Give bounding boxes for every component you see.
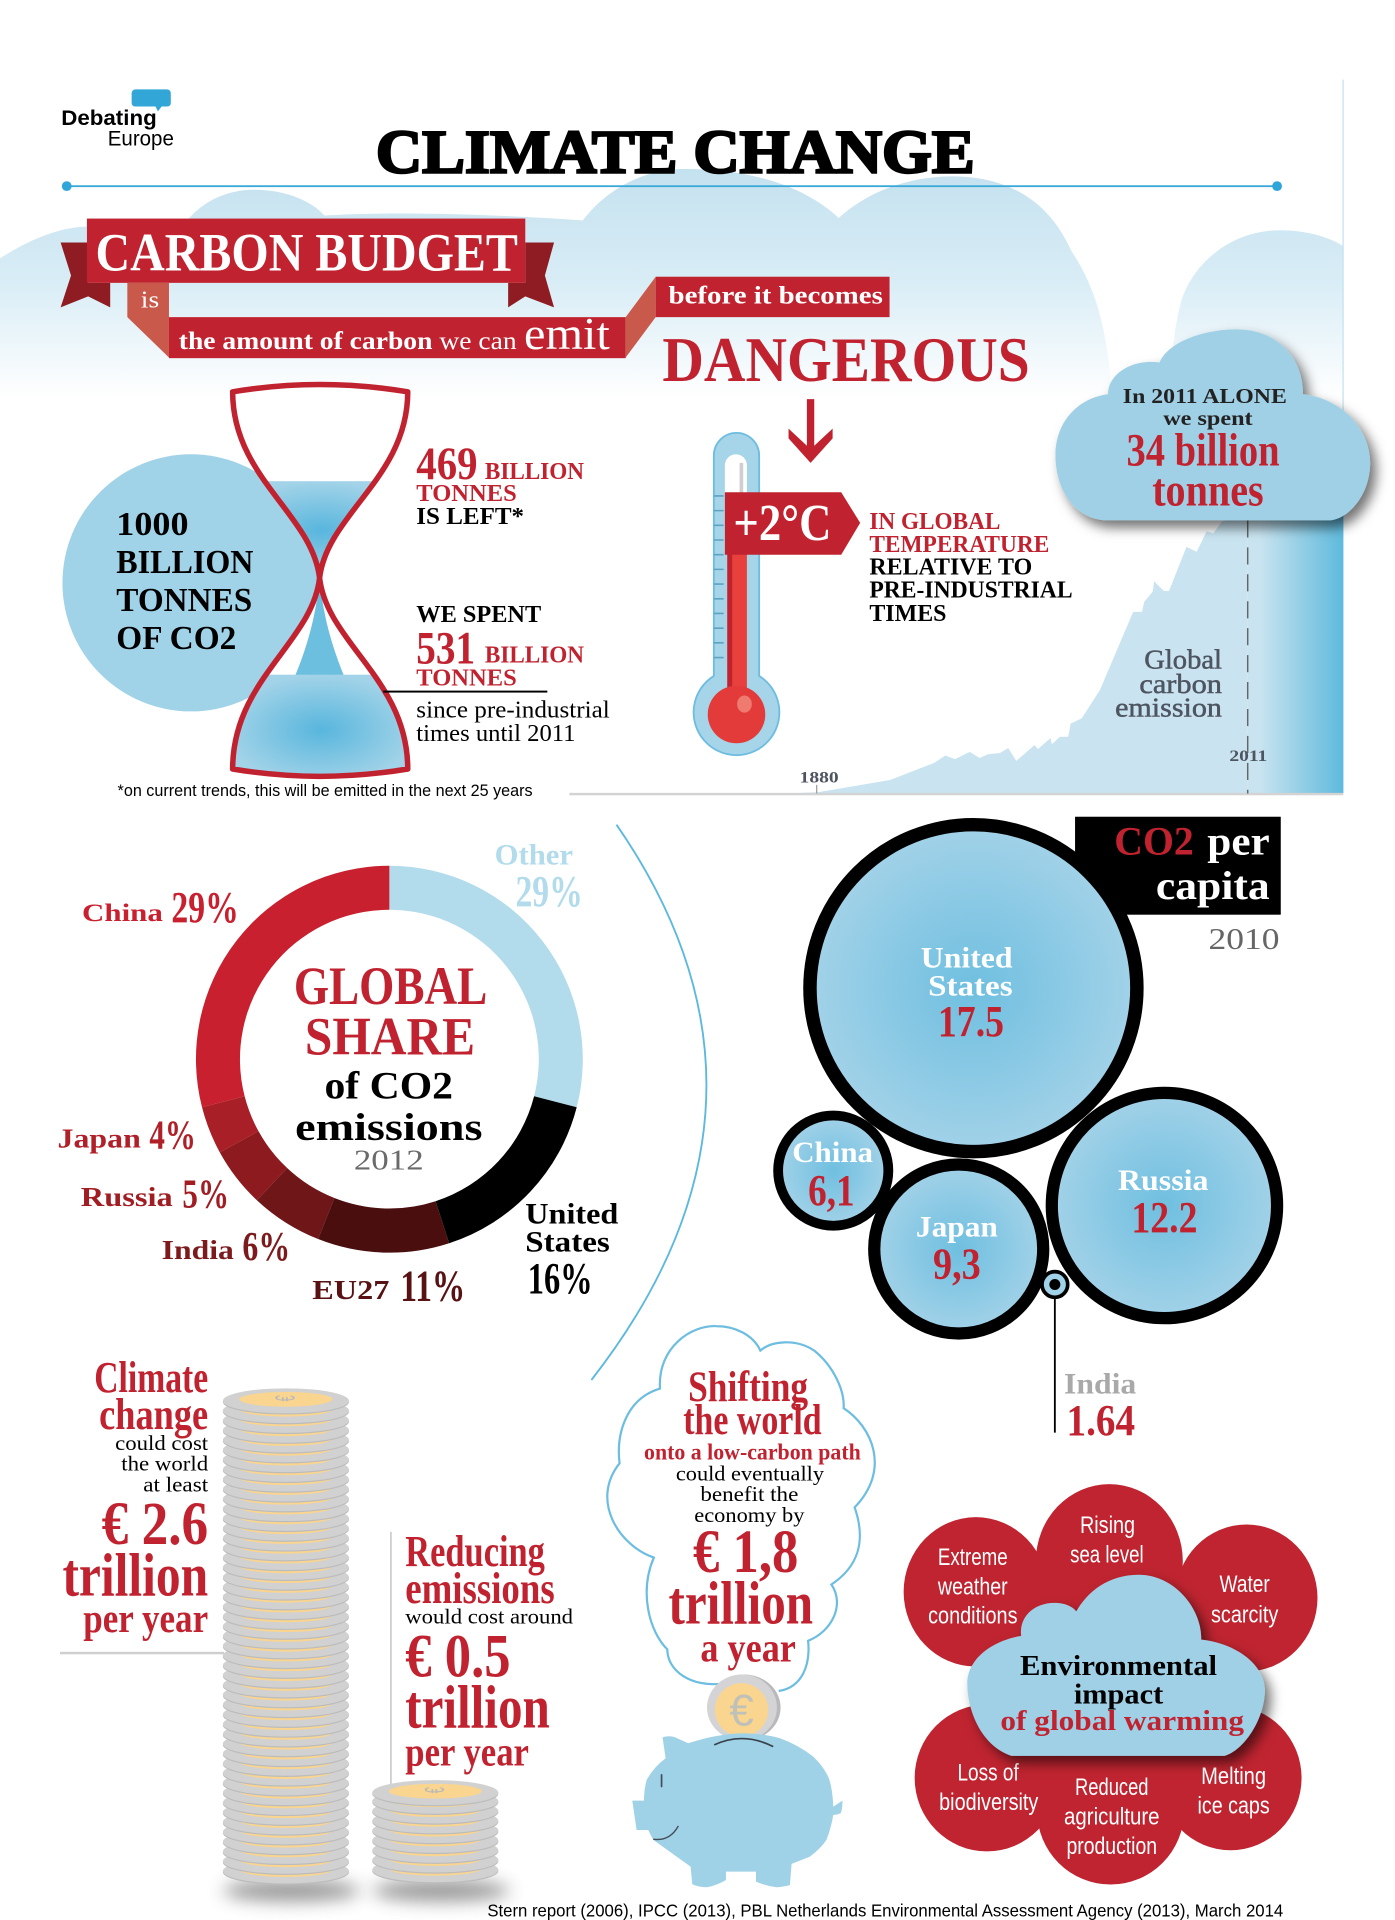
petal labels: weather (937, 1573, 1008, 1600)
text: in global temperature (869, 508, 1073, 627)
donut labels: 29% (171, 883, 239, 932)
circle: 1000 billion tonnes: TONNES (116, 581, 252, 619)
bubble: United States: United (921, 942, 1013, 974)
label: CO2 per capita: 2010 (1209, 922, 1280, 956)
ribbon: the amount of carbon we can emit: the amount of carbon we can (179, 326, 517, 355)
donut title: GLOBAL (294, 956, 487, 1016)
text: in global temperature: TIMES (869, 600, 946, 627)
text: climate change cost: Climate (94, 1353, 208, 1402)
donut labels: States (525, 1226, 610, 1258)
centre cloud: impact (1074, 1679, 1164, 1710)
area chart: global carbon emission: 1880 (800, 769, 839, 786)
bubble: India: India (1064, 1368, 1137, 1400)
label: CO2 per capita: capita (1156, 863, 1270, 908)
ribbon: the amount of carbon we can emit: emit (524, 309, 610, 359)
arrow: down to thermometer (789, 399, 833, 463)
bubble: United States: 17.5 (938, 997, 1004, 1046)
stat: 469 billion left: IS LEFT* (416, 503, 524, 530)
segment: India 6% (257, 1168, 334, 1239)
cloud: 34 billion tonnes (1055, 329, 1370, 520)
heading: carbon budget: CARBON BUDGET (96, 223, 518, 283)
bubble: China: 6,1 (808, 1166, 855, 1215)
title: CLIMATE CHANGE (376, 119, 975, 187)
petal labels: Rising (1080, 1512, 1135, 1539)
centre cloud: of global warming (1000, 1706, 1244, 1737)
donut labels: 29% (515, 867, 583, 916)
circle: 1000 billion tonnes: BILLION (116, 543, 254, 581)
icon: piggy bank with coin: € (729, 1686, 754, 1735)
donut chart: global share of CO2 emissions (196, 866, 583, 1253)
donut labels: 11% (400, 1261, 465, 1310)
text: reducing emissions cost (390, 1527, 574, 1784)
logo: Europe (108, 128, 174, 151)
ribbon: before it becomes: before it becomes (669, 281, 883, 310)
segment: other 29% (389, 866, 583, 1107)
donut labels: United (525, 1198, 618, 1230)
cloud: shifting the world: a year (700, 1626, 796, 1672)
petal labels: ice caps (1197, 1792, 1270, 1819)
label: CO2 per capita: per (1207, 819, 1270, 864)
donut labels: 16% (528, 1254, 593, 1303)
petal labels: Loss of (958, 1759, 1019, 1786)
source line: Stern report (2006), IPCC (2013), PBL Netherlands Environmental Assessment Agency (2013), March 2014 (487, 1900, 1284, 1920)
text: climate change cost: at least (143, 1472, 208, 1496)
cloud: shifting the world: trillion (669, 1570, 813, 1638)
heading: dangerous: DANGEROUS (662, 324, 1030, 395)
text: in global temperature: RELATIVE TO (869, 553, 1032, 580)
circle: 1000 billion tonnes: 1000 (116, 505, 189, 543)
text: reducing emissions cost: emissions (405, 1564, 555, 1613)
coin stack: small (372, 1780, 509, 1902)
stat: 469 billion left: 469 (416, 439, 478, 490)
bubble: Russia (1052, 1093, 1277, 1318)
bubble: China (778, 1116, 888, 1226)
ribbon tails (61, 242, 554, 307)
footnote: *on current trends, this will be emitted in the next 25 years (118, 781, 533, 800)
stat: 531 billion spent: 531 (416, 624, 475, 675)
cloud: 34 billion tonnes: 34 billion (1126, 425, 1280, 476)
stat: 469 billion left: BILLION (485, 458, 584, 485)
petal labels: biodiversity (939, 1789, 1039, 1816)
coin stack: small: € (420, 1787, 450, 1793)
area chart: global carbon emission: 2011 (1229, 748, 1267, 765)
segment: EU27 11% (318, 1198, 449, 1253)
donut labels: Other (495, 839, 573, 871)
text: climate change cost: trillion (62, 1542, 208, 1610)
petal labels: conditions (928, 1603, 1018, 1630)
area chart: global carbon emission: Global (1144, 645, 1222, 675)
donut labels: 5% (182, 1171, 229, 1217)
text: climate change cost: € 2.6 (102, 1490, 208, 1558)
ribbon: is (127, 283, 169, 358)
bubble: United States: States (928, 971, 1013, 1003)
area chart: global carbon emission (569, 514, 1343, 795)
hourglass (227, 384, 416, 785)
segment: Japan 4% (202, 1096, 258, 1152)
cloud: 34 billion tonnes: tonnes (1152, 466, 1264, 517)
cloud: 34 billion tonnes: we spent (1163, 406, 1253, 430)
segment: United States 16% (436, 1096, 577, 1243)
cloud: shifting the world: € 1,8 (693, 1518, 798, 1586)
ribbon: the amount of carbon we can emit (169, 309, 626, 359)
bubble: United States (810, 825, 1137, 1152)
ribbon: is: is (141, 286, 159, 313)
donut labels: China (82, 898, 163, 927)
centre cloud: Environmental (1020, 1651, 1217, 1682)
flower: environmental impact (904, 1484, 1317, 1884)
background clouds (0, 169, 1343, 398)
stat: 469 billion left (416, 439, 584, 530)
red petals (904, 1484, 1317, 1884)
stat: 531 billion spent: TONNES (416, 665, 517, 692)
donut title: SHARE (305, 1006, 475, 1066)
centre cloud (967, 1575, 1265, 1756)
text: reducing emissions cost: would cost around (405, 1605, 574, 1629)
segment: Russia 5% (220, 1131, 287, 1200)
coin stack: large: € (271, 1395, 301, 1401)
flag: +2 degrees C: +2°C (733, 495, 831, 552)
cloud: shifting the world: onto a low-carbon path (644, 1440, 861, 1466)
area chart: global carbon emission: carbon (1139, 669, 1223, 699)
donut labels: 6% (242, 1224, 290, 1270)
donut title: emissions (295, 1106, 482, 1149)
icon: piggy bank with coin (632, 1674, 843, 1887)
petal labels: Extreme (938, 1544, 1008, 1571)
circle: 1000 billion tonnes (62, 454, 320, 711)
bubble: Japan: 9,3 (933, 1239, 981, 1288)
donut title: 2012 (354, 1145, 424, 1176)
stat: 531 billion spent: since pre-industrial (416, 697, 610, 724)
petal labels: Water (1220, 1571, 1270, 1598)
cloud: 34 billion tonnes: In 2011 ALONE (1123, 384, 1287, 408)
cloud: shifting the world (607, 1326, 875, 1691)
text: climate change cost: per year (83, 1596, 208, 1642)
text: reducing emissions cost: € 0.5 (405, 1622, 511, 1690)
bubble: India (1042, 1272, 1137, 1445)
stat: 469 billion left: TONNES (416, 480, 517, 507)
petal labels: agriculture (1064, 1803, 1160, 1830)
divider arc (591, 825, 706, 1380)
cloud: shifting the world: economy by (694, 1503, 805, 1527)
petal labels: Reduced (1075, 1774, 1149, 1801)
thermometer (694, 433, 779, 755)
stat: 531 billion spent: WE SPENT (416, 601, 541, 628)
bubble: Japan: Japan (916, 1212, 998, 1244)
petal labels (928, 1512, 1279, 1860)
area chart: global carbon emission: emission (1115, 692, 1223, 722)
donut labels: Russia (81, 1182, 173, 1212)
donut labels: Japan (58, 1123, 141, 1153)
donut labels (58, 839, 618, 1310)
right edge line (1342, 80, 1344, 793)
bubble: China: China (792, 1137, 873, 1169)
cloud: shifting the world: Shifting (688, 1364, 808, 1411)
text: in global temperature: PRE-INDUSTRIAL (869, 577, 1073, 604)
text: climate change cost: could cost (115, 1431, 208, 1455)
donut title: of CO2 (324, 1064, 453, 1107)
text: in global temperature: TEMPERATURE (869, 531, 1049, 558)
petal labels: sea level (1070, 1541, 1144, 1568)
donut title (294, 956, 487, 1176)
text: climate change cost: change (99, 1390, 208, 1439)
donut labels: EU27 (312, 1275, 389, 1305)
stat: 531 billion spent (383, 601, 610, 747)
banner: carbon budget definition (61, 219, 890, 359)
text: climate change cost (60, 1353, 224, 1654)
donut labels: India (162, 1235, 234, 1265)
cloud: shifting the world: benefit the (700, 1482, 798, 1506)
bubble: Russia: 12.2 (1131, 1193, 1197, 1242)
bubble: Japan (874, 1164, 1043, 1333)
ribbon: before it becomes (626, 277, 890, 358)
bubble: Russia: Russia (1118, 1165, 1209, 1197)
text: reducing emissions cost: per year (405, 1730, 529, 1776)
text: reducing emissions cost: Reducing (405, 1527, 545, 1576)
text: climate change cost: the world (121, 1452, 209, 1476)
petal labels: production (1066, 1833, 1157, 1860)
cloud: shifting the world: the world (683, 1397, 822, 1444)
stat: 531 billion spent: BILLION (485, 641, 584, 668)
title rule (62, 181, 1282, 191)
text: in global temperature: IN GLOBAL (869, 508, 1000, 535)
donut labels: 4% (149, 1113, 196, 1159)
stat: 531 billion spent: times until 2011 (416, 720, 575, 747)
segment: China 29% (196, 866, 389, 1107)
coin stack: large (223, 1388, 360, 1902)
logo (61, 89, 174, 151)
bubble: India: 1.64 (1066, 1396, 1135, 1445)
petal labels: Melting (1201, 1763, 1266, 1790)
label: CO2 per capita: CO2 (1114, 819, 1194, 864)
text: reducing emissions cost: trillion (405, 1674, 550, 1742)
petal labels: scarcity (1211, 1601, 1279, 1628)
logo: Debating (61, 107, 157, 130)
cloud: shifting the world: could eventually (676, 1461, 825, 1485)
circle: 1000 billion tonnes: OF CO2 (116, 619, 236, 657)
label: CO2 per capita (1075, 817, 1281, 956)
